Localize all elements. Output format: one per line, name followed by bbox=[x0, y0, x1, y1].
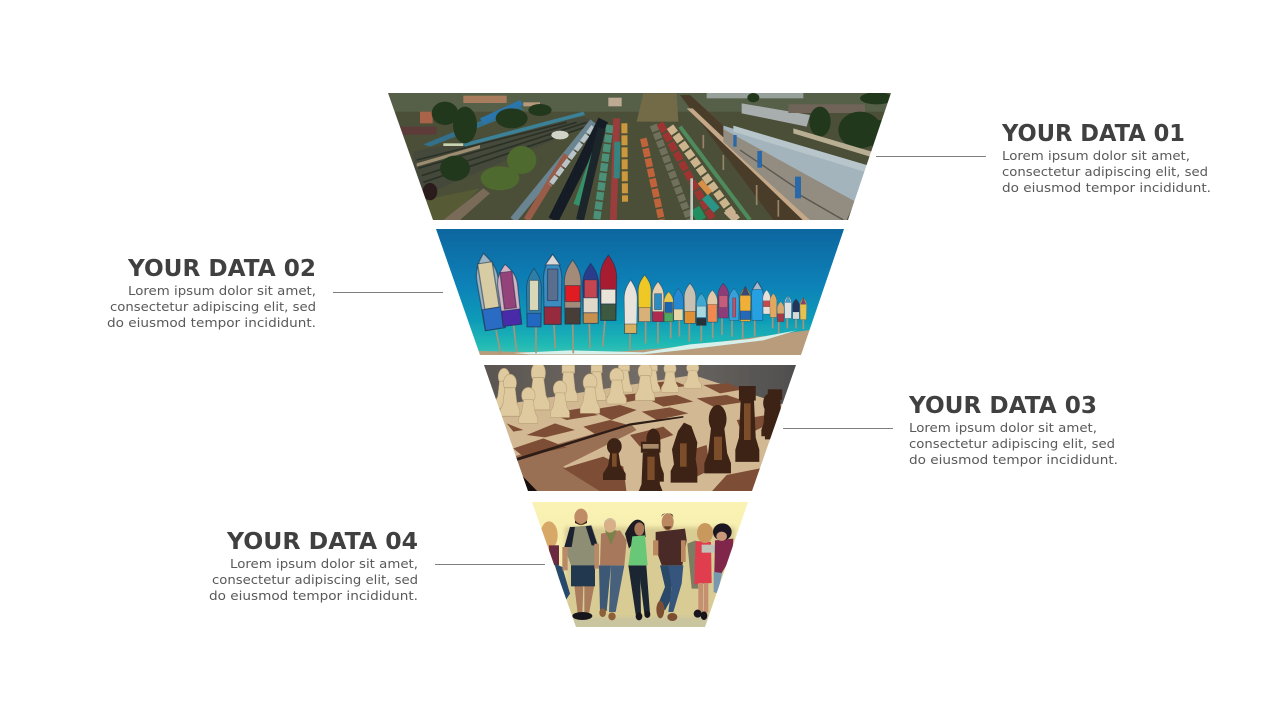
boats bbox=[473, 252, 807, 333]
text block: your data 01: Lorem ipsum dolor sit amet, bbox=[1002, 149, 1190, 164]
left tracks area bbox=[426, 124, 586, 184]
sand beach bbox=[478, 330, 810, 355]
funnel band 2: boats photo bbox=[430, 228, 850, 358]
person left: woman at edge bbox=[540, 521, 570, 600]
text block: your data 02: consectetur adipiscing elit, sed bbox=[110, 300, 316, 315]
highlights on dark pieces bbox=[612, 403, 751, 480]
text block: your data 03: Lorem ipsum dolor sit amet, bbox=[909, 421, 1097, 436]
board bbox=[499, 376, 782, 491]
moorings bbox=[496, 317, 803, 353]
text block: your data 02 bbox=[107, 254, 316, 331]
person: woman in maroon top bbox=[713, 523, 733, 594]
connector line 4 bbox=[435, 564, 545, 566]
text block: your data 03: YOUR DATA 03 bbox=[908, 391, 1097, 419]
person: man in dark brown shirt bbox=[653, 513, 687, 621]
far town strip bbox=[380, 92, 900, 135]
station building bbox=[723, 126, 867, 202]
white chess pieces bbox=[495, 362, 701, 423]
trees bbox=[432, 92, 893, 181]
wall shadow behind people bbox=[565, 527, 735, 617]
text block: your data 03: consectetur adipiscing elit, sed bbox=[909, 437, 1115, 452]
text block: your data 01: YOUR DATA 01 bbox=[1001, 119, 1185, 147]
text block: your data 01: do eiusmod tempor incididunt. bbox=[1002, 181, 1211, 196]
text block: your data 03 bbox=[908, 391, 1118, 468]
connector line 1 bbox=[876, 156, 986, 158]
person: woman in red dress bbox=[687, 523, 717, 620]
trains bbox=[513, 118, 750, 220]
person: woman in green top bbox=[625, 520, 650, 620]
text block: your data 04: do eiusmod tempor incididunt. bbox=[209, 589, 418, 604]
wooden frame and table bbox=[513, 423, 637, 493]
text block: your data 03: do eiusmod tempor incididunt. bbox=[909, 453, 1118, 468]
text block: your data 02: do eiusmod tempor incididunt. bbox=[107, 316, 316, 331]
funnel band 4: people photo bbox=[532, 502, 748, 627]
text block: your data 02: Lorem ipsum dolor sit amet, bbox=[128, 284, 316, 299]
text block: your data 01 bbox=[1001, 119, 1211, 196]
person: older woman in brown bbox=[599, 518, 627, 620]
person: grey raglan shirt bbox=[562, 509, 599, 620]
funnel band 1: rail yard photo bbox=[388, 93, 891, 220]
funnel band 3: chess photo bbox=[484, 365, 796, 491]
text block: your data 04: Lorem ipsum dolor sit amet, bbox=[230, 557, 418, 572]
text block: your data 04: YOUR DATA 04 bbox=[226, 527, 418, 555]
connector line 3 bbox=[783, 428, 893, 430]
squares bbox=[507, 381, 770, 493]
right embankment bbox=[680, 95, 802, 220]
text block: your data 02: YOUR DATA 02 bbox=[127, 254, 316, 282]
connector line 2 bbox=[333, 292, 443, 294]
dark chess pieces bbox=[603, 386, 785, 504]
text block: your data 04: consectetur adipiscing elit, sed bbox=[212, 573, 418, 588]
text block: your data 01: consectetur adipiscing elit, sed bbox=[1002, 165, 1208, 180]
text block: your data 04 bbox=[209, 527, 418, 604]
